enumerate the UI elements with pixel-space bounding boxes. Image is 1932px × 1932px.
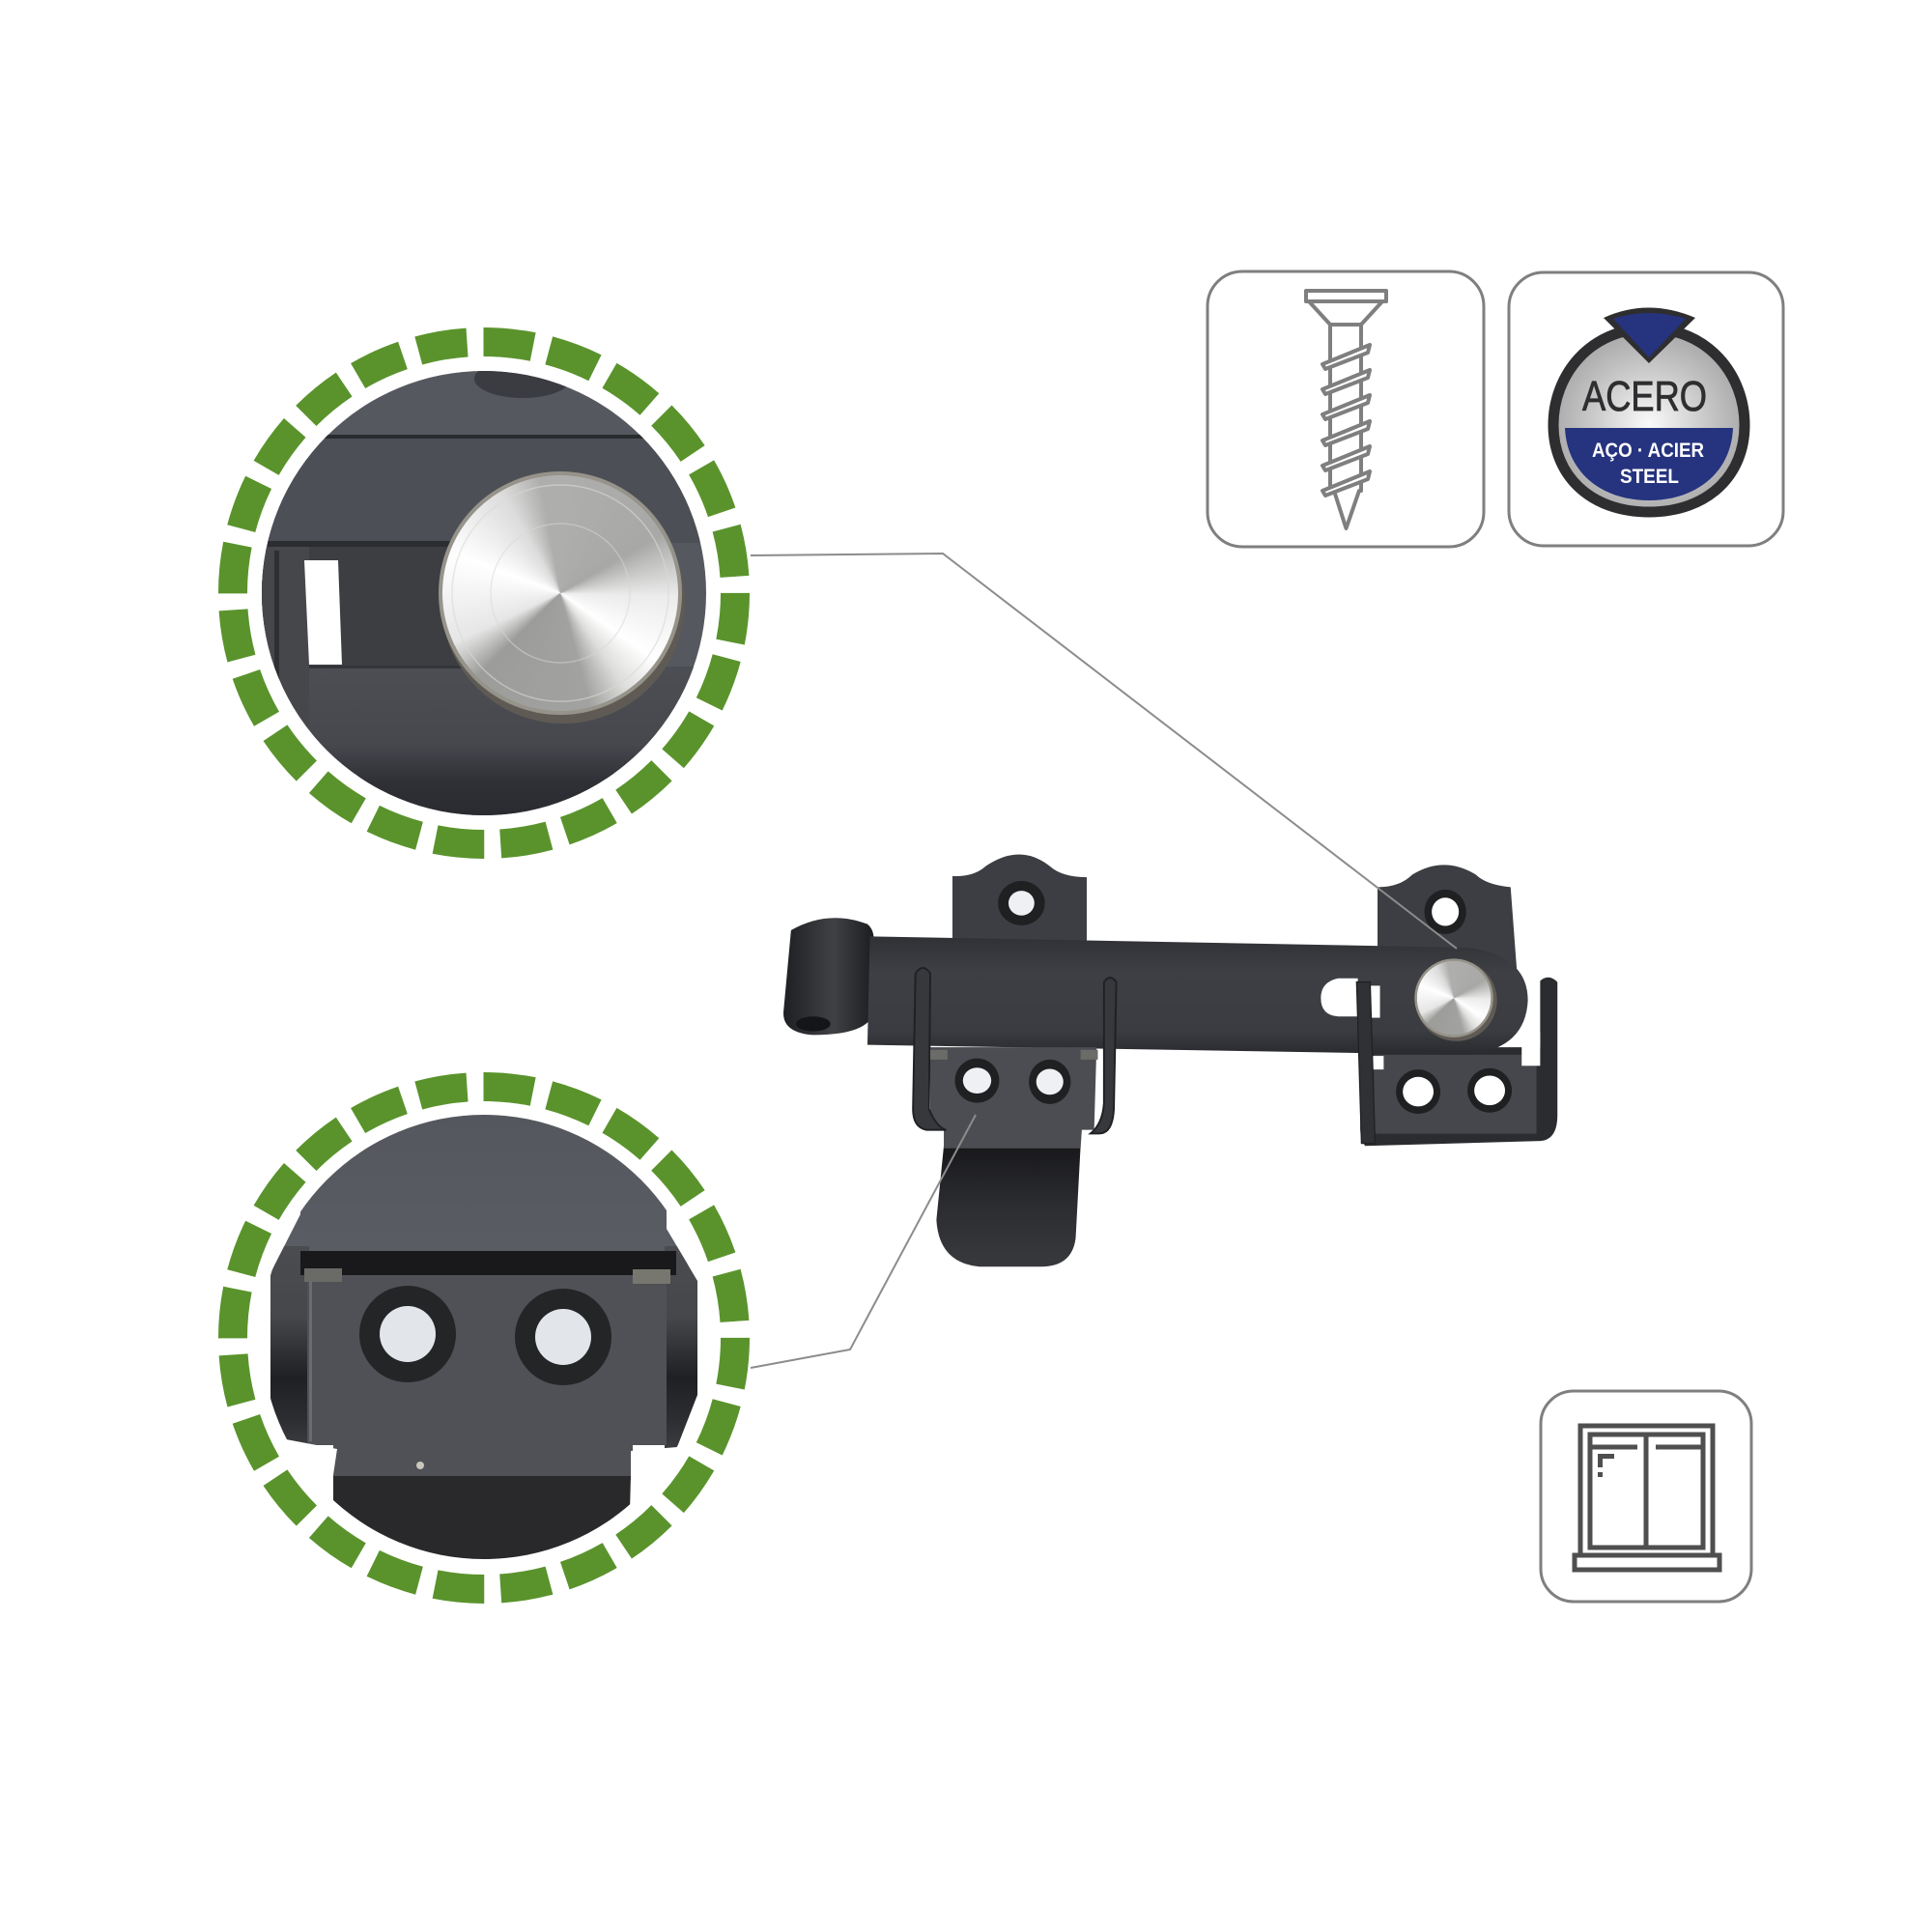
- lower right plate: [1360, 978, 1557, 1146]
- badge: ACERO: AÇO · ACIER: [1592, 440, 1704, 462]
- lever bar: [867, 936, 1528, 1055]
- lower left plate: [930, 1047, 1096, 1149]
- knob body: [446, 564, 685, 724]
- icon panel: window: [1541, 1391, 1751, 1602]
- dashed ring: [233, 342, 735, 844]
- knob face: [442, 475, 678, 711]
- badge: ACERO: ACERO: [1582, 373, 1707, 420]
- icon panel: screw: [1208, 271, 1484, 547]
- callout line: plate: [751, 1115, 976, 1368]
- callout line: knob: [751, 554, 1457, 949]
- photo: plate close-up: [261, 1111, 715, 1573]
- right bracket stem: [1091, 978, 1117, 1133]
- holes: [359, 1286, 456, 1382]
- badge: ACERO: STEEL: [1620, 466, 1679, 488]
- detail circle: plate: [233, 1087, 735, 1589]
- knuckle: [783, 918, 874, 1035]
- icon: window: [1575, 1426, 1719, 1570]
- slot: [1321, 979, 1358, 1016]
- photo: knob close-up: [261, 359, 715, 821]
- icon: screw: [1306, 291, 1386, 528]
- upper left plate: [952, 855, 1087, 955]
- badge: ACERO: [1553, 307, 1745, 512]
- small knob: [1414, 958, 1497, 1041]
- upper right plate: [1378, 865, 1518, 985]
- icon panel: steel badge: [1509, 272, 1783, 546]
- left bracket stem: [913, 968, 947, 1130]
- handle tab: [936, 1146, 1081, 1266]
- latch photo: [783, 855, 1557, 1266]
- right bracket stem 2: [1356, 982, 1375, 1144]
- detail circle: knob: [233, 342, 735, 844]
- dashed ring: [233, 1087, 735, 1589]
